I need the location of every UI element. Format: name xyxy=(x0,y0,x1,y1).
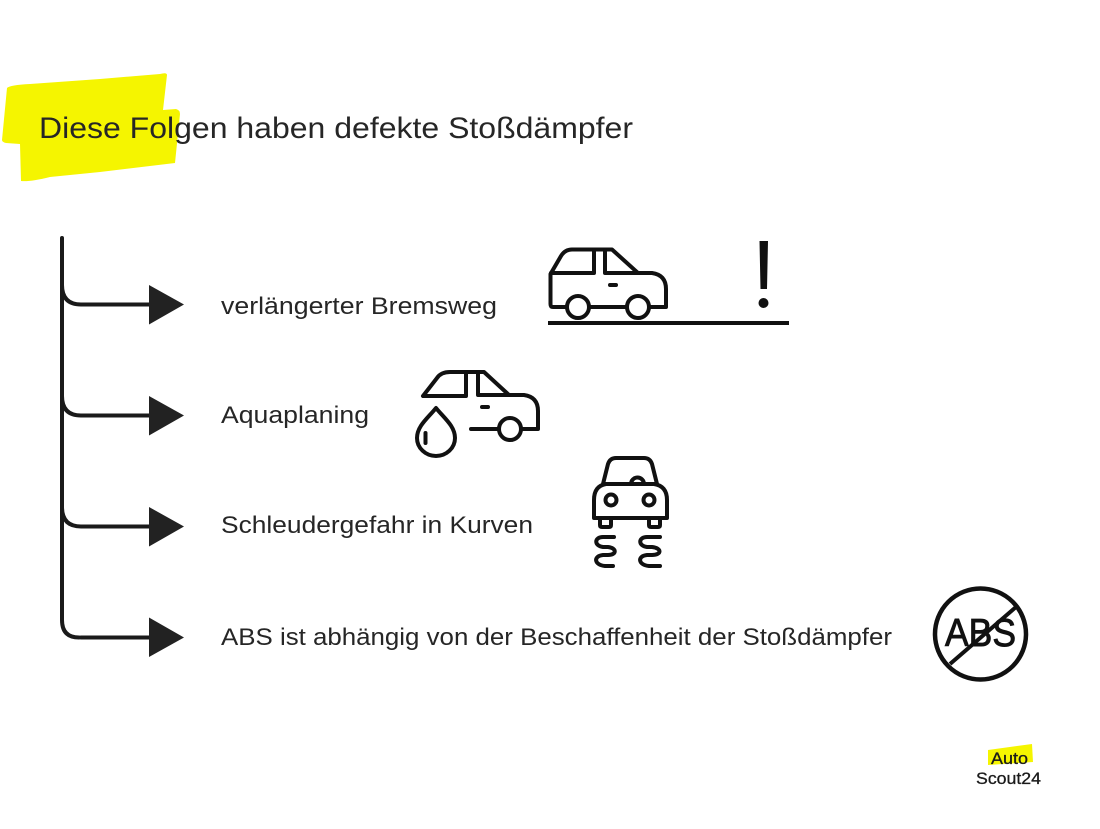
logo: AutoScout24: Scout24 xyxy=(976,769,1041,788)
timeline with four arrows xyxy=(62,238,184,657)
arrow 3 xyxy=(62,507,184,546)
arrow 1 xyxy=(62,285,184,324)
arrow 4 xyxy=(81,618,184,657)
label: ABS dependence: ABS ist abhängig von der Beschaffenheit der Stoßdämpfer xyxy=(221,624,892,651)
vertical line xyxy=(62,238,79,638)
label: longer braking distance: verlängerter Bremsweg xyxy=(221,293,497,320)
arrow 2 xyxy=(62,396,184,436)
icon: car with braking distance and exclamation mark xyxy=(548,241,789,323)
icon: car front view with springs xyxy=(594,458,667,566)
title text: Diese Folgen haben defekte Stoßdämpfer xyxy=(39,112,633,145)
logo: AutoScout24 xyxy=(976,744,1041,788)
label: skid risk in curves: Schleudergefahr in Kurven xyxy=(221,512,533,539)
icon: crossed-out ABS: ABS xyxy=(945,612,1016,655)
icon: car with water drop xyxy=(417,372,538,456)
yellow brush highlight xyxy=(2,73,180,181)
title with yellow brush highlight xyxy=(2,73,633,181)
icon: crossed-out ABS xyxy=(935,588,1026,680)
label: aquaplaning: Aquaplaning xyxy=(221,402,369,429)
logo: AutoScout24: Auto xyxy=(991,749,1028,768)
